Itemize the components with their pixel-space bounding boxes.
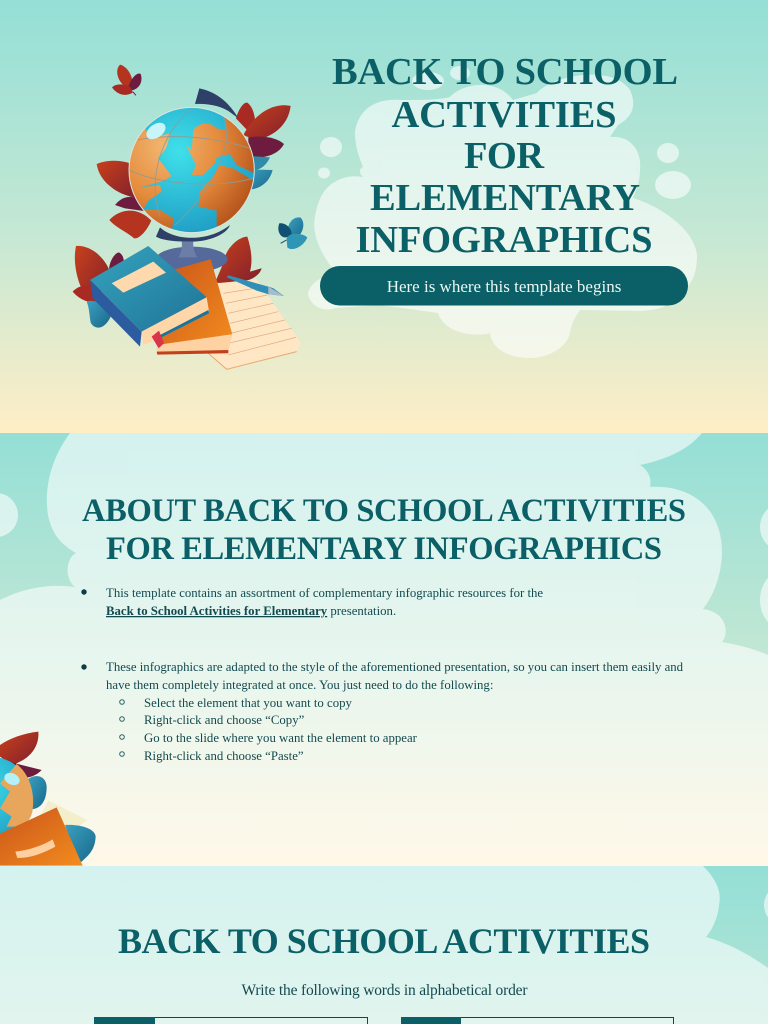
panel: about section (0, 433, 768, 866)
heading (82, 500, 685, 560)
bullet text block: Back to School Activities for Elementary presentation. (106, 604, 396, 618)
title (332, 51, 678, 261)
leaves: left (97, 161, 151, 238)
bullet text block: Select the element that you want to copy (144, 696, 352, 710)
title: INFOGRAPHICS (356, 219, 652, 261)
panel: activities section (0, 866, 768, 1024)
lined paper (208, 279, 301, 369)
large cloud background (0, 866, 768, 1024)
globe stand (156, 88, 238, 272)
bullet text block: These infographics are adapted to the style of the aforementioned presentation, so you can insert them easily and (106, 660, 684, 674)
bullet text block (81, 586, 684, 763)
subtitle pill (320, 266, 688, 306)
panel: title slide (0, 0, 768, 433)
bullet text block: This template contains an assortment of complementary infographic resources for the (106, 586, 543, 600)
illustration: globe and books (73, 65, 307, 369)
heading: FOR ELEMENTARY INFOGRAPHICS (106, 531, 662, 567)
leaves: lower left (73, 246, 124, 328)
icon: red butterfly (112, 65, 141, 95)
instruction text: Write the following words in alphabetical order (242, 982, 528, 999)
word box left (94, 1017, 368, 1024)
large cloud background (0, 433, 768, 866)
title: BACK TO SCHOOL (332, 51, 678, 93)
heading: ABOUT BACK TO SCHOOL ACTIVITIES (82, 493, 686, 529)
title: ACTIVITIES (392, 94, 616, 136)
bullet text block: have them completely integrated at once. You just need to do the following: (106, 678, 493, 692)
bullet text block: Right-click and choose “Copy” (144, 713, 305, 727)
title: ELEMENTARY (370, 177, 640, 219)
blue book (90, 246, 209, 348)
globe (123, 107, 260, 233)
illustration: globe, leaves and book (0, 732, 96, 866)
orange book (157, 259, 232, 355)
icon: blue butterfly (278, 217, 307, 249)
leaves: lower right (215, 237, 262, 283)
heading: BACK TO SCHOOL ACTIVITIES (118, 921, 650, 961)
leaves: upper right (236, 103, 291, 190)
subtitle pill: Here is where this template begins (387, 277, 621, 296)
bullet text block: Go to the slide where you want the element to appear (144, 731, 418, 745)
word box right (401, 1017, 674, 1024)
bullet text block: Right-click and choose “Paste” (144, 749, 304, 763)
pen (227, 275, 284, 296)
title: FOR (464, 135, 545, 177)
cloud backdrop behind title (308, 66, 697, 358)
